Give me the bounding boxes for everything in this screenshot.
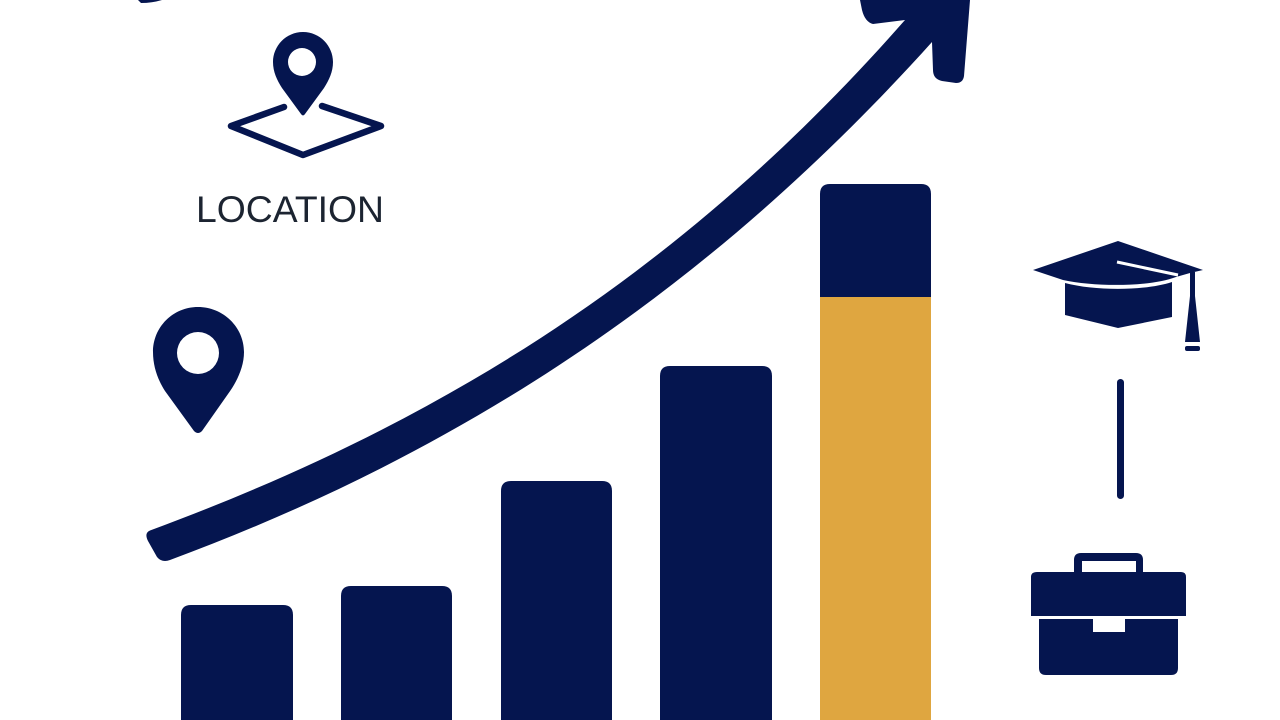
label: location: LOCATION	[196, 189, 384, 230]
icon: graduation cap	[1033, 241, 1203, 351]
bar chart	[181, 184, 931, 720]
bar 4	[660, 366, 772, 720]
cropped fragment at top left	[138, 0, 162, 3]
icon: location pin on map	[231, 32, 381, 155]
bar 3	[501, 481, 612, 720]
bar 5 highlighted	[820, 184, 931, 720]
growth arrow	[146, 0, 970, 561]
icon: briefcase	[1031, 553, 1186, 675]
connector line	[1117, 379, 1124, 499]
bar 2	[341, 586, 452, 720]
bar 1	[181, 605, 293, 720]
icon: location pin	[153, 307, 244, 433]
